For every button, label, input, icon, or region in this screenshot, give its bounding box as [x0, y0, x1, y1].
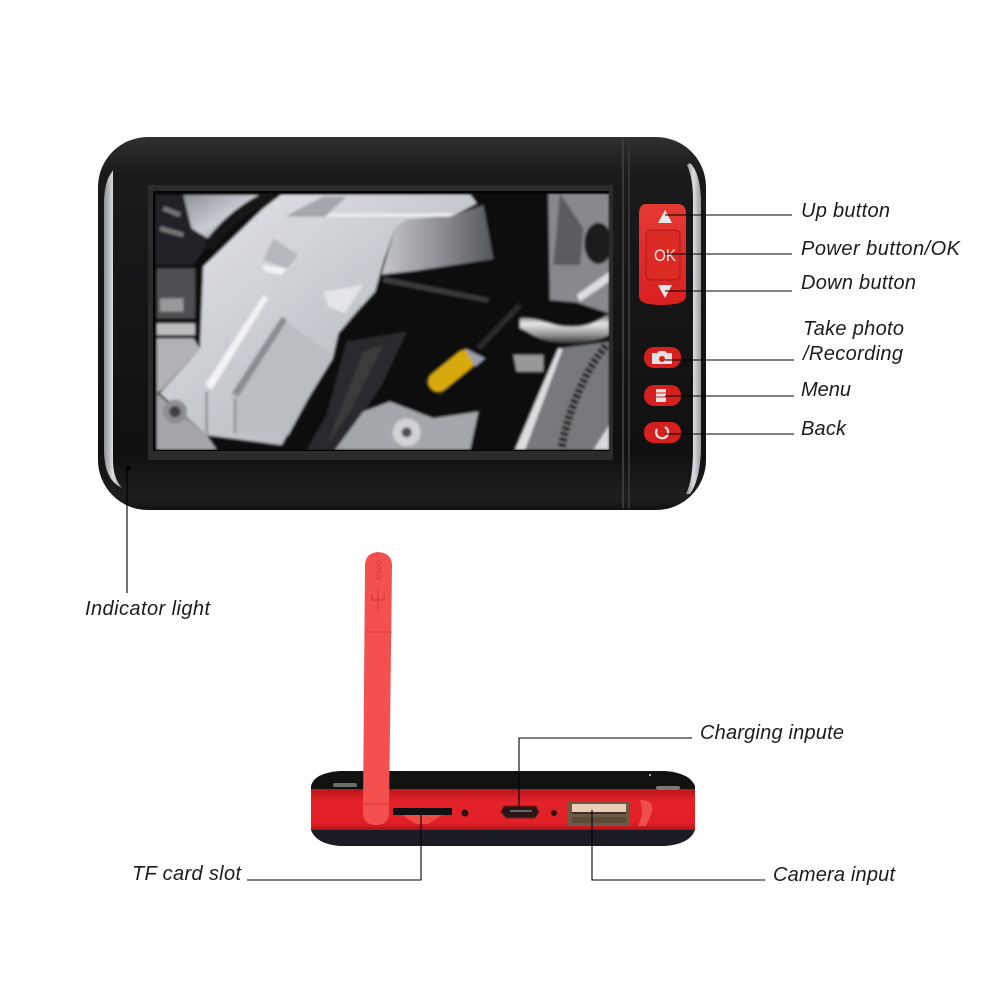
TF card slot — [393, 808, 452, 815]
screen image: engine bay — [155, 193, 612, 450]
red antenna — [363, 552, 392, 825]
indicator light dot — [126, 466, 130, 470]
OK label: OK — [654, 246, 677, 265]
microphone hole — [462, 810, 468, 816]
label: charging input: Charging inpute — [700, 722, 844, 744]
device: side view with ports — [311, 552, 695, 846]
antenna OPEN label: OPEN — [374, 560, 381, 580]
bottom dark shell — [311, 826, 695, 846]
shell highlights — [333, 774, 680, 790]
label: take photo: Take photo — [803, 318, 904, 340]
top black shell — [311, 771, 695, 794]
label: down button: Down button — [801, 272, 916, 294]
monitor body — [98, 137, 706, 510]
label: menu: Menu — [801, 379, 851, 401]
label: indicator light: Indicator light — [85, 598, 211, 620]
USB camera port — [568, 801, 630, 826]
side seam lines — [622, 139, 630, 508]
up arrow — [658, 210, 672, 223]
device: front view monitor — [98, 137, 706, 510]
left edge highlight — [104, 170, 122, 488]
screen black border — [153, 191, 609, 451]
label: recording: /Recording — [801, 343, 903, 365]
status hole — [551, 810, 557, 816]
red band — [311, 789, 695, 830]
label: TF card slot: TF card slot — [132, 863, 242, 885]
right edge highlight — [686, 163, 701, 494]
back button — [644, 422, 681, 443]
menu button — [644, 385, 681, 406]
side curve highlight — [638, 800, 652, 826]
micro USB charging port — [501, 806, 539, 818]
leader lines — [127, 215, 794, 880]
down arrow — [658, 285, 672, 298]
label: camera input: Camera input — [773, 864, 896, 886]
antenna USB mark — [372, 588, 384, 612]
camera button — [644, 347, 681, 368]
slot notch — [402, 815, 442, 824]
label: power button: Power button/OK — [801, 238, 962, 260]
label: up button: Up button — [801, 200, 890, 222]
up / OK / down button — [639, 204, 686, 305]
screen bezel — [148, 185, 613, 460]
label: back: Back — [801, 418, 847, 440]
